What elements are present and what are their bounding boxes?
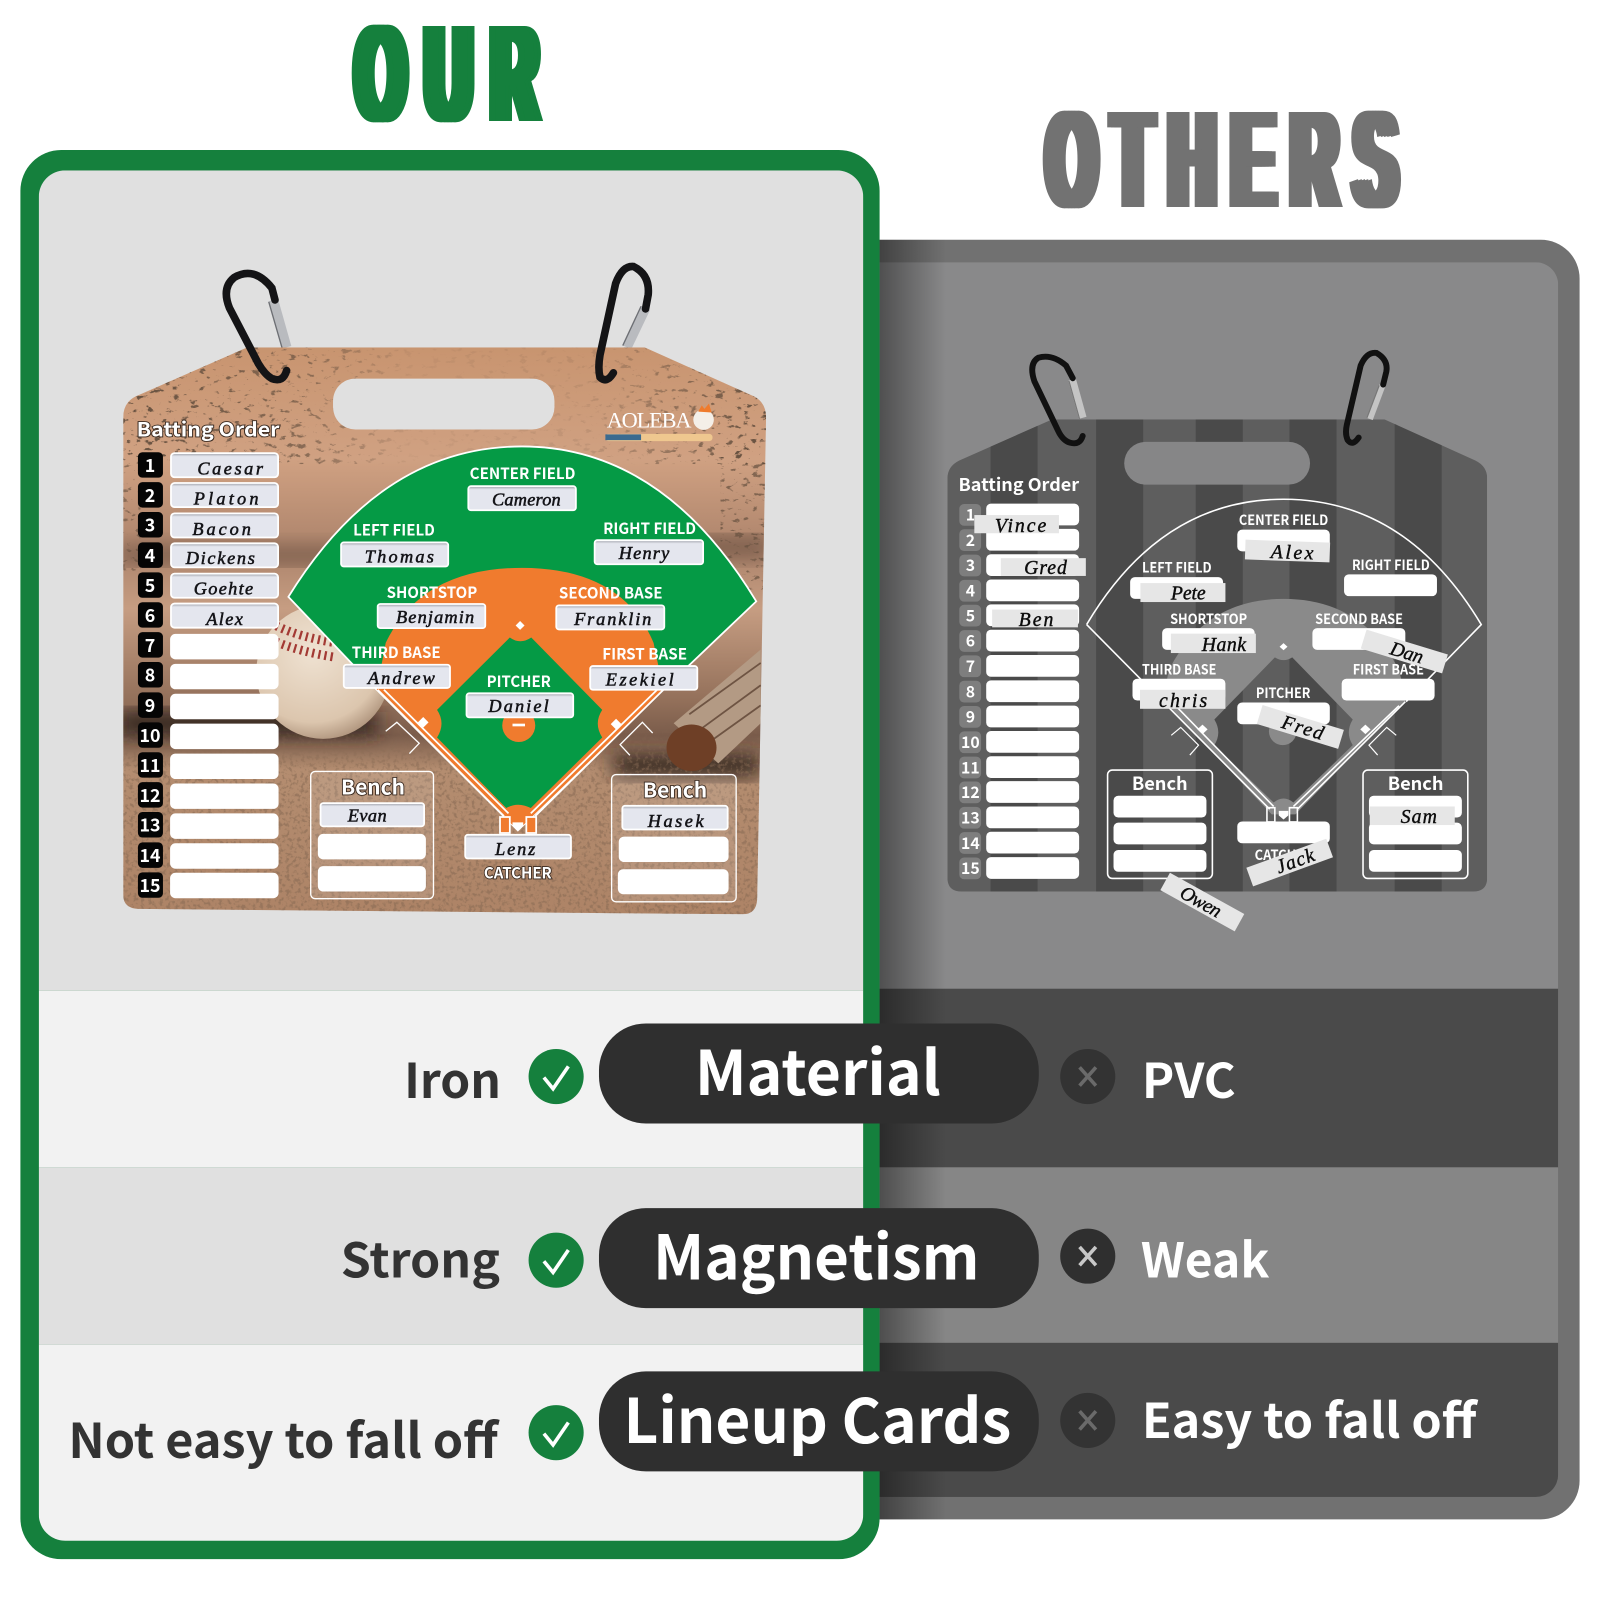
batting numbers: 1	[145, 452, 155, 478]
bench right: Hasek	[647, 811, 704, 831]
position labels: LEFT FIELD	[353, 519, 435, 541]
carabiner metal right	[623, 306, 646, 347]
position labels: CENTER FIELD	[470, 462, 575, 484]
our value: strong: Strong	[341, 1222, 500, 1292]
loose name tags: Pete	[1170, 583, 1206, 605]
icon: check	[529, 1049, 584, 1104]
loose name tags: Ben	[1019, 609, 1054, 631]
bench left	[311, 771, 433, 899]
batting numbers: 6	[145, 602, 155, 628]
loose name tags: Dan	[1387, 637, 1426, 668]
batting slots with names: Dickens	[185, 548, 255, 568]
batting numbers: 9	[966, 705, 975, 728]
batting numbers: 14	[961, 831, 980, 854]
batting numbers: 10	[139, 722, 161, 748]
batting numbers: 14	[139, 842, 161, 868]
batting numbers: 4	[966, 579, 975, 602]
bench right	[612, 773, 736, 902]
batting slots with names: Caesar	[197, 459, 264, 479]
carabiner left	[226, 273, 287, 380]
pill: material	[599, 1023, 1039, 1123]
position labels: RIGHT FIELD	[1352, 554, 1430, 574]
batting numbers: 2	[145, 482, 155, 508]
diamond field	[288, 446, 756, 833]
bench right	[1363, 770, 1468, 878]
batting numbers	[959, 503, 981, 879]
batting slots with names: Platon	[193, 488, 258, 508]
batting numbers: 15	[139, 872, 161, 898]
batting numbers: 7	[966, 654, 975, 677]
position labels: CATCHER	[1255, 844, 1314, 864]
position slots with names: Lenz	[494, 839, 535, 859]
batting numbers: 12	[139, 782, 161, 808]
batting numbers: 3	[966, 553, 975, 576]
position slots with names: Daniel	[487, 696, 549, 716]
position labels: CATCHER	[484, 862, 552, 884]
position slots	[1130, 530, 1437, 843]
position labels: SECOND BASE	[1315, 608, 1403, 628]
icon: check	[529, 1233, 584, 1288]
batting slots with names: Alex	[205, 609, 243, 629]
position slots with names: Franklin	[573, 609, 651, 629]
board body with stripes	[947, 419, 1487, 891]
our value: not easy to fall off: Not easy to fall off	[68, 1402, 500, 1472]
carabiner right	[1346, 353, 1387, 443]
loose name tags: Jack	[1273, 844, 1319, 878]
position slots with names: Ezekiel	[605, 669, 674, 689]
position labels: LEFT FIELD	[1142, 556, 1212, 576]
loose name tags: Sam	[1401, 806, 1437, 828]
batting order heading: Batting Order	[959, 472, 1080, 497]
loose name tags: Hank	[1201, 634, 1247, 656]
position labels: SHORTSTOP	[387, 581, 477, 603]
batting numbers: 9	[145, 692, 155, 718]
position slots with names: Cameron	[492, 489, 561, 509]
position labels: THIRD BASE	[1142, 658, 1216, 678]
position slots with names	[341, 486, 703, 859]
row 3	[68, 1371, 1479, 1472]
bench right: Bench	[1388, 770, 1444, 796]
position labels	[352, 462, 696, 884]
product: our lineup board	[118, 266, 774, 920]
loose name tags: Vince	[995, 515, 1047, 537]
carabiner metal left	[269, 300, 287, 348]
carabiner right	[599, 266, 648, 380]
product: others lineup board	[947, 353, 1487, 933]
batting slots with names: Goehte	[194, 579, 253, 599]
handle hole	[1124, 442, 1310, 485]
batting numbers: 13	[139, 812, 161, 838]
bench left: Evan	[347, 805, 387, 825]
batting slots with names	[170, 453, 279, 898]
pill: lineup cards: Lineup Cards	[623, 1372, 1011, 1461]
batting numbers: 15	[961, 856, 980, 879]
others value: easy to fall off: Easy to fall off	[1142, 1382, 1479, 1452]
others value: pvc: PVC	[1142, 1042, 1236, 1112]
batting numbers: 6	[966, 629, 975, 652]
batting numbers: 10	[961, 730, 980, 753]
batting numbers: 8	[966, 679, 975, 702]
diamond field	[1087, 499, 1481, 822]
position slots with names: Andrew	[367, 668, 436, 688]
batting numbers: 7	[145, 632, 155, 658]
batting numbers: 5	[145, 572, 155, 598]
batting numbers: 11	[961, 755, 980, 778]
loose name tags: Fred	[1278, 711, 1326, 745]
batting numbers: 1	[966, 503, 975, 526]
bench left: Bench	[1132, 770, 1188, 796]
row 1	[404, 1023, 1236, 1123]
heading: OTHERS: OTHERS	[1047, 83, 1414, 237]
panel: our card	[20, 150, 880, 1559]
batting numbers: 2	[966, 528, 975, 551]
position labels: SECOND BASE	[559, 582, 663, 604]
batting numbers: 4	[145, 542, 156, 568]
position labels: FIRST BASE	[1353, 658, 1424, 678]
position labels: PITCHER	[487, 670, 551, 692]
position slots with names: Benjamin	[396, 607, 474, 627]
pill: magnetism	[599, 1208, 1039, 1308]
panel: others card	[880, 240, 1580, 1520]
icon: cross	[1060, 1229, 1115, 1284]
loose name tags: Gred	[1024, 557, 1067, 579]
position labels: FIRST BASE	[602, 642, 687, 664]
board photo background	[118, 344, 774, 920]
loose name tags: Owen	[1176, 882, 1226, 922]
batting numbers: 11	[139, 752, 161, 778]
position labels: CENTER FIELD	[1239, 509, 1328, 529]
batting numbers	[138, 452, 163, 898]
pill: material: Material	[695, 1024, 941, 1113]
batting numbers: 13	[961, 805, 980, 828]
handle hole	[333, 379, 554, 429]
position slots with names: Henry	[618, 543, 670, 563]
icon: cross	[1060, 1049, 1115, 1104]
batting numbers: 3	[145, 512, 155, 538]
bench right: Bench	[643, 773, 707, 803]
carabiner left	[1032, 357, 1083, 443]
position labels: SHORTSTOP	[1170, 608, 1247, 628]
loose name tags: chris	[1159, 690, 1208, 712]
our value: iron: Iron	[404, 1042, 501, 1112]
position labels: RIGHT FIELD	[603, 517, 696, 539]
others value: weak: Weak	[1141, 1222, 1269, 1292]
position slots with names: Thomas	[365, 546, 434, 566]
position labels	[1142, 509, 1430, 864]
brand logo: AOLEBA	[607, 408, 692, 433]
brand logo	[605, 404, 714, 441]
bench left: Bench	[341, 771, 405, 801]
batting numbers: 8	[145, 662, 155, 688]
batting numbers: 5	[966, 603, 975, 626]
position labels: THIRD BASE	[352, 641, 441, 663]
batting numbers: 12	[961, 780, 980, 803]
batting slots	[986, 504, 1079, 879]
row 2	[341, 1208, 1269, 1308]
heading: OUR: OUR	[356, 0, 558, 151]
loose name tags: Alex	[1268, 541, 1314, 564]
batting order heading: Batting Order	[137, 414, 280, 443]
loose name tags	[974, 515, 1455, 933]
icon: cross	[1060, 1393, 1115, 1448]
pill: magnetism: Magnetism	[653, 1209, 980, 1298]
icon: check	[529, 1405, 584, 1460]
position labels: PITCHER	[1256, 682, 1311, 702]
bench left	[1108, 770, 1212, 878]
batting slots with names: Bacon	[192, 519, 251, 539]
